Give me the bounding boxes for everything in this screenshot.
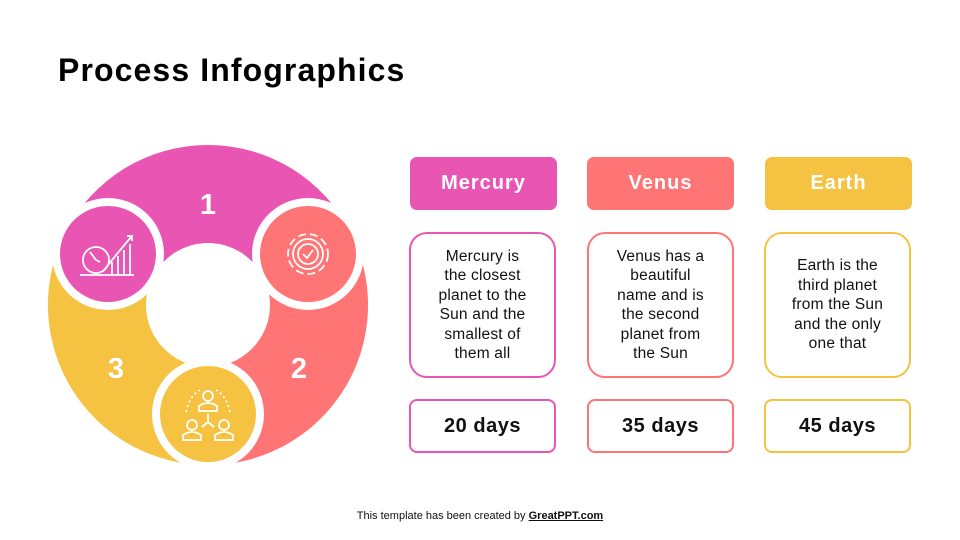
text: Earth: from the Sun [792,296,883,313]
text: Venus [587,232,734,378]
segment 3 yellow [48,232,208,465]
icon: team [160,366,256,462]
header: Earth: Earth [810,172,867,194]
text: Earth: third planet [798,277,877,294]
text: Mercury: Mercury is [446,248,519,264]
text: Mercury: the closest [444,267,521,284]
days: Venus [587,399,734,453]
text: Venus: Venus has a [617,248,704,264]
header: Venus: Venus [629,172,692,194]
ring diagram [48,145,368,463]
text: Venus: beautiful [630,267,691,284]
days: Earth: 45 days [799,414,876,436]
text: Earth: one that [809,335,866,352]
days: Mercury: 20 days [444,414,521,436]
header: Venus [587,157,734,210]
text: Earth: and the only [794,316,881,333]
text: Mercury: Sun and the [440,306,525,323]
text: Mercury [409,232,556,378]
number 2: 2 [291,353,307,385]
days: Earth [764,399,911,453]
segment 1 pink [65,145,351,277]
header: Mercury [410,157,557,210]
text: Venus: the second [622,306,699,323]
icon: clock and chart [60,206,156,302]
text: Mercury: planet to the [439,286,526,304]
header: Mercury: Mercury [441,172,526,194]
text: Earth [764,232,911,378]
text: Venus: name and is [617,286,704,304]
number 3: 3 [108,353,124,385]
header: Earth [765,157,912,210]
icon: gear [260,206,356,302]
text: Earth: Earth is the [797,257,878,274]
segment 2 coral [208,232,368,465]
text: Mercury: smallest of [444,326,521,342]
text: Mercury: them all [455,345,510,362]
days: Mercury [409,399,556,453]
footer: This template has been created by GreatPPT.com [357,510,603,522]
days: Venus: 35 days [622,414,699,436]
number 1: 1 [200,189,216,221]
text: Venus: the Sun [633,345,688,362]
title: Process Infographics [58,52,405,88]
text: Venus: planet from [621,326,700,342]
